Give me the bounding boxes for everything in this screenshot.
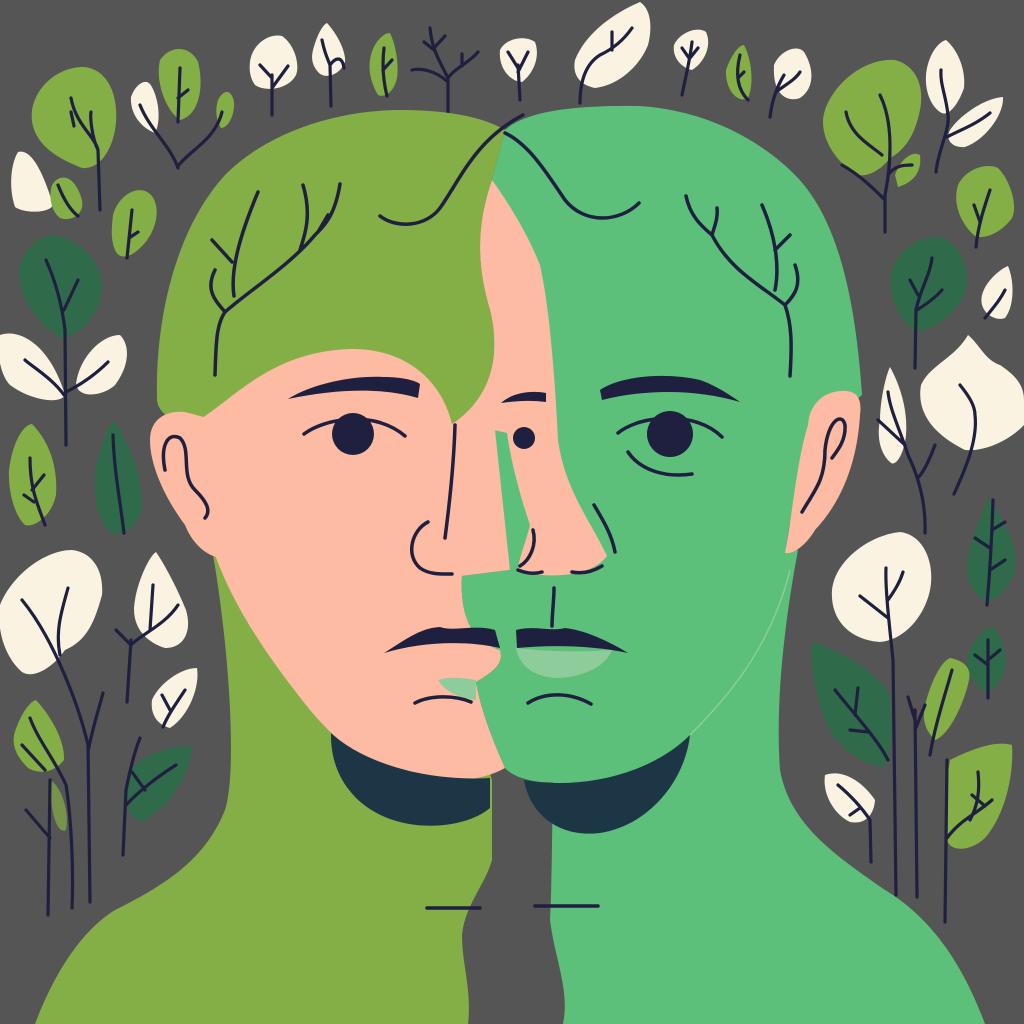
right ear xyxy=(785,391,860,553)
tree: small cream bottom right xyxy=(825,773,875,862)
right neck shadow xyxy=(524,735,690,834)
tree: cream pair top right xyxy=(926,40,1003,172)
tree: olive leaf mid left xyxy=(9,424,56,525)
body xyxy=(550,550,985,1024)
tree: cream narrow right xyxy=(878,367,935,533)
tree: olive small centre right xyxy=(924,658,969,755)
tree: cream large top xyxy=(574,2,650,103)
centre eyebrow xyxy=(501,392,546,403)
face xyxy=(190,349,510,781)
tree: cream top 4 xyxy=(674,30,708,95)
tree: olive right xyxy=(956,166,1014,247)
forehead curve left xyxy=(380,115,523,224)
right lip line xyxy=(528,695,591,704)
centre dot eye xyxy=(513,427,535,449)
face details xyxy=(163,115,845,908)
right figure xyxy=(438,106,985,1024)
tree: big cream right xyxy=(920,335,1024,494)
left eye xyxy=(304,413,405,455)
tree: bare branches xyxy=(412,28,478,115)
hair xyxy=(157,110,505,440)
left neck shadow xyxy=(331,733,490,826)
forehead and nose skin xyxy=(452,180,607,575)
right ear line xyxy=(802,419,845,512)
left eyebrow xyxy=(288,377,420,399)
tree: olive bottom right xyxy=(945,744,1012,922)
tree: small dark right xyxy=(967,626,1006,698)
tree: cream and olive branching xyxy=(131,49,234,168)
philtrum line xyxy=(552,588,554,626)
left trees xyxy=(0,49,234,915)
left lip line xyxy=(415,697,471,703)
left chin patch xyxy=(438,678,476,700)
right eye xyxy=(618,411,722,475)
tree: small cream left xyxy=(11,152,82,219)
tree: cream top 3 xyxy=(500,38,537,100)
nose lines xyxy=(412,425,615,574)
tree: cream leaf right of big xyxy=(116,552,188,702)
tree: cream top 2 xyxy=(312,23,345,106)
tree: large dark leaf xyxy=(812,642,892,767)
tree: top left olive xyxy=(32,67,116,210)
tree: big cream with tall trunk xyxy=(832,532,931,895)
top trees xyxy=(250,2,811,117)
neck lines xyxy=(427,906,598,908)
right trees xyxy=(812,40,1024,922)
tree: olive bottom left xyxy=(14,700,73,915)
tree: dark bottom left xyxy=(123,738,192,855)
tree: olive top right xyxy=(726,45,751,100)
tree: small cream xyxy=(152,668,198,728)
right eyebrow xyxy=(600,376,740,402)
lower lip xyxy=(516,648,612,678)
tree: cream top 1 xyxy=(250,36,297,115)
head xyxy=(462,106,862,782)
tree: cream top 5 xyxy=(770,48,811,117)
tree: dark leaf with two cream leaves xyxy=(0,235,127,445)
right forehead branch xyxy=(686,196,798,376)
tree: dark round right xyxy=(891,237,967,368)
left figure xyxy=(35,110,510,1024)
neck shadows xyxy=(331,733,690,834)
tree: big olive top right xyxy=(823,60,921,232)
left forehead branch xyxy=(211,184,340,375)
tree: dark right xyxy=(967,497,1016,605)
jaw line xyxy=(690,570,790,735)
left mouth xyxy=(384,627,500,653)
tree: big cream lower left xyxy=(0,550,103,902)
left ear line xyxy=(163,437,208,518)
forehead curve right xyxy=(505,133,639,218)
tree: bare trunk xyxy=(908,697,925,897)
tree: dark leaf mid left xyxy=(95,421,142,534)
tree: olive top xyxy=(369,33,398,96)
ear xyxy=(150,412,235,559)
tree: small olive xyxy=(112,190,157,258)
right mouth xyxy=(516,628,628,653)
body xyxy=(35,555,492,1024)
tree: small cream right xyxy=(981,266,1013,319)
